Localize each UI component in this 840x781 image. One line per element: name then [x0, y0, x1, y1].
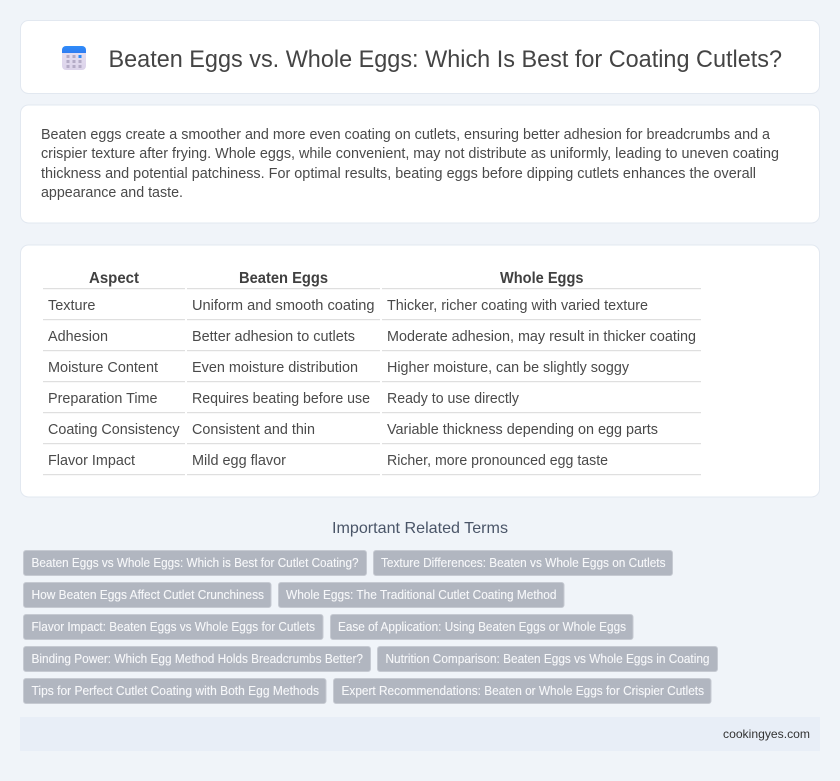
table header: [89, 270, 584, 287]
related term chips: Whole Eggs: The Traditional Cutlet Coating Method: [286, 588, 556, 602]
footer: cookingyes.com: [723, 727, 810, 741]
table header: Beaten Eggs: [239, 270, 328, 287]
row: flavor impact: [48, 453, 608, 469]
row: coating consistency: Variable thickness depending on egg parts: [387, 422, 658, 438]
heading: important related terms: Important Related Terms: [332, 520, 508, 537]
table header: Whole Eggs: [500, 270, 584, 287]
row: texture: [48, 298, 648, 314]
panel: summary paragraph: [20, 105, 820, 223]
row: adhesion: [48, 329, 696, 345]
panel: summary paragraph: thickness and potential patchiness. For optimal results, beating eggs before dipping cutlets enhances the overall: [41, 166, 756, 182]
row: moisture content: Moisture Content: [48, 360, 158, 376]
row: coating consistency: Coating Consistency: [48, 422, 180, 438]
related term chips: Flavor Impact: Beaten Eggs vs Whole Eggs for Cutlets: [32, 620, 315, 634]
header panel: [20, 20, 820, 94]
panel: comparison table: [20, 245, 820, 497]
title: Beaten Eggs vs. Whole Eggs: Which Is Best for Coating Cutlets?: [108, 46, 782, 73]
icon: calendar: [62, 46, 86, 70]
row: coating consistency: Consistent and thin: [192, 422, 315, 438]
row: preparation time: Preparation Time: [48, 391, 158, 407]
panel: summary paragraph: crispier texture after frying. Whole eggs, while convenient, may not distribute as uniformly, leading to uneven coating: [41, 146, 779, 162]
related term chips: Nutrition Comparison: Beaten Eggs vs Whole Eggs in Coating: [386, 652, 710, 666]
row: preparation time: [48, 391, 520, 407]
related term chips: Ease of Application: Using Beaten Eggs or Whole Eggs: [338, 620, 626, 634]
row: texture: Thicker, richer coating with varied texture: [387, 298, 648, 314]
related term chips: Texture Differences: Beaten vs Whole Eggs on Cutlets: [381, 556, 666, 570]
row: texture: Uniform and smooth coating: [192, 298, 374, 314]
row: flavor impact: Richer, more pronounced egg taste: [387, 453, 608, 469]
row: preparation time: Requires beating before use: [192, 391, 370, 407]
footer: [20, 717, 820, 751]
row: moisture content: [48, 360, 630, 376]
row: adhesion: Moderate adhesion, may result in thicker coating: [387, 329, 696, 345]
row: texture: Texture: [48, 298, 96, 314]
panel: summary paragraph: Beaten eggs create a smoother and more even coating on cutlets, ensuring better adhesion for breadcrumbs and a: [41, 127, 771, 143]
related term chips: Tips for Perfect Cutlet Coating with Both Egg Methods: [32, 684, 319, 698]
row: moisture content: Even moisture distribution: [192, 360, 358, 376]
related term chips: [24, 550, 718, 704]
related term chips: Expert Recommendations: Beaten or Whole Eggs for Crispier Cutlets: [342, 684, 704, 698]
row: flavor impact: Flavor Impact: [48, 453, 135, 469]
related term chips: Beaten Eggs vs Whole Eggs: Which is Best for Cutlet Coating?: [32, 556, 358, 570]
row: moisture content: Higher moisture, can be slightly soggy: [387, 360, 630, 376]
row: adhesion: Better adhesion to cutlets: [192, 329, 355, 345]
table header: Aspect: [89, 270, 140, 287]
panel: summary paragraph: appearance and taste.: [41, 185, 183, 201]
row: flavor impact: Mild egg flavor: [192, 453, 286, 469]
row: adhesion: Adhesion: [48, 329, 108, 345]
related term chips: How Beaten Eggs Affect Cutlet Crunchiness: [32, 588, 264, 602]
row: preparation time: Ready to use directly: [387, 391, 520, 407]
row: coating consistency: [48, 422, 658, 438]
related term chips: Binding Power: Which Egg Method Holds Breadcrumbs Better?: [32, 652, 363, 666]
